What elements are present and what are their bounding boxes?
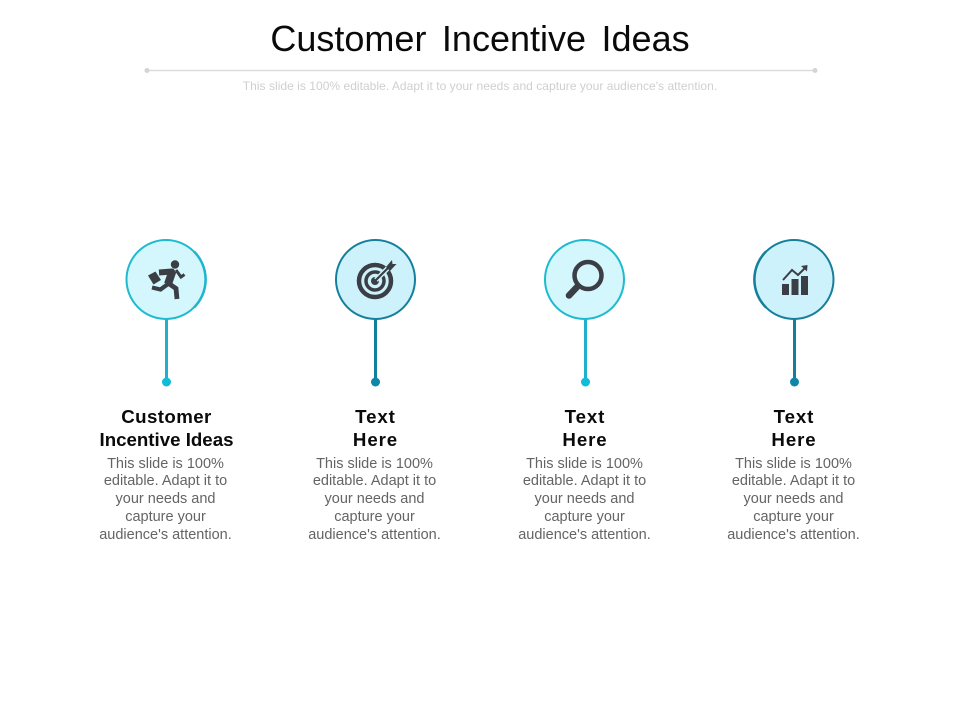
heading 4: [771, 406, 817, 450]
heading 1: Customer: [121, 406, 212, 427]
text 2: [308, 456, 441, 543]
heading 3: Text: [565, 406, 605, 427]
heading 2: Here: [353, 429, 398, 450]
heading 3: Here: [562, 429, 608, 450]
text 4: capture your: [753, 509, 834, 525]
text 2: your needs and: [325, 491, 424, 507]
text 4: [727, 456, 860, 543]
title: Customer Incentive Ideas: [270, 18, 690, 59]
text 3: This slide is 100%: [526, 456, 643, 472]
text 1: This slide is 100%: [107, 456, 224, 472]
text 1: editable. Adapt it to: [104, 473, 227, 489]
text 3: editable. Adapt it to: [523, 473, 646, 489]
text 3: audience's attention.: [518, 527, 651, 543]
text 4: editable. Adapt it to: [732, 473, 855, 489]
text 2: editable. Adapt it to: [313, 473, 436, 489]
marker 4: [754, 240, 834, 386]
icon: running businessman: [148, 260, 184, 299]
subtitle: This slide is 100% editable. Adapt it to your needs and capture your audience's attention.: [243, 79, 717, 93]
text 2: capture your: [334, 509, 415, 525]
marker 2: [336, 240, 415, 386]
text 1: capture your: [125, 509, 206, 525]
marker 1: [126, 240, 206, 386]
icon: rising bar chart: [782, 265, 808, 295]
heading 4: Text: [774, 406, 814, 427]
title divider: [144, 68, 818, 73]
text 1: [99, 456, 232, 543]
heading 1: Incentive Ideas: [100, 429, 234, 450]
text 4: audience's attention.: [727, 527, 860, 543]
text 4: This slide is 100%: [735, 456, 852, 472]
text 2: This slide is 100%: [316, 456, 433, 472]
text 3: [518, 456, 651, 543]
text 4: your needs and: [744, 491, 843, 507]
text 3: capture your: [544, 509, 625, 525]
heading 2: [353, 406, 398, 450]
icon: magnifying glass: [569, 262, 602, 296]
text 2: audience's attention.: [308, 527, 441, 543]
text 1: audience's attention.: [99, 527, 232, 543]
heading 3: [562, 406, 608, 450]
icon: target with arrow: [359, 260, 396, 297]
marker 3: [545, 240, 624, 386]
text 3: your needs and: [535, 491, 634, 507]
heading 4: Here: [771, 429, 817, 450]
heading 1: [100, 406, 234, 450]
text 1: your needs and: [116, 491, 215, 507]
heading 2: Text: [355, 406, 396, 427]
